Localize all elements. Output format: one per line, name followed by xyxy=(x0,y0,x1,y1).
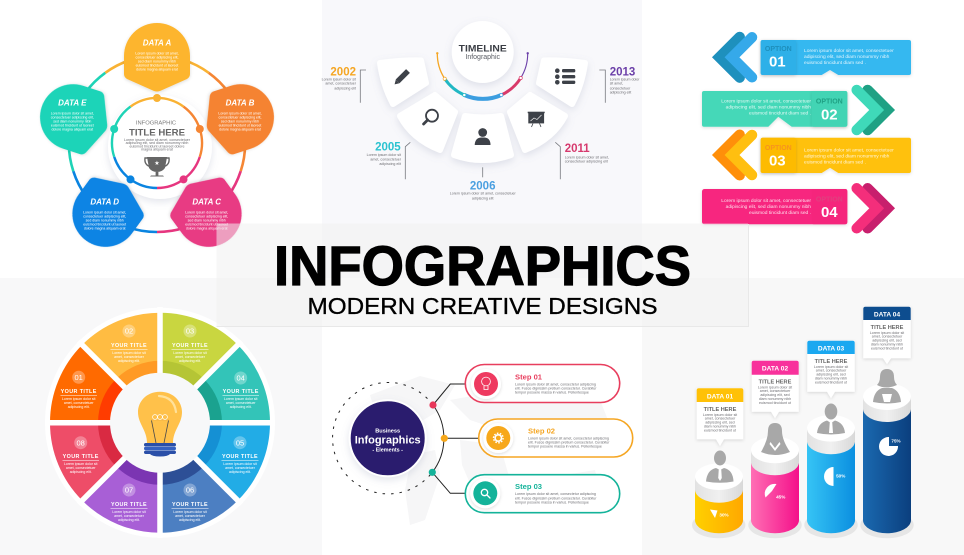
segment 06 xyxy=(172,484,208,522)
center title: euismod tincidunt ut laoreet dolore xyxy=(130,144,184,148)
milestone 2002: 2002 xyxy=(330,66,356,78)
center title: magna aliquam erat xyxy=(141,148,173,152)
cylinder 03: 50% xyxy=(836,474,845,478)
icon: gear xyxy=(494,433,503,443)
segment 07: YOUR TITLE xyxy=(111,502,147,508)
card: DATA 03: diam nonummy nibh xyxy=(815,377,847,381)
card: DATA 02: DATA 02 xyxy=(762,366,788,373)
card: DATA C: sed diam nonummy nibh xyxy=(188,218,226,222)
dashed orbit xyxy=(333,382,433,494)
icon: magnifier xyxy=(481,489,490,498)
step 02: Step 02 xyxy=(528,426,555,436)
card: DATA D: sed diam nonummy nibh xyxy=(86,218,124,222)
card: DATA D: consectetuer adipiscing elit, xyxy=(83,214,126,218)
segment 05 xyxy=(222,436,258,474)
step 02: elit. Fusce dignissim pretium consectetur. Curabitur xyxy=(528,440,610,444)
option 01: adipiscing elit, sed diam nonummy nibh xyxy=(804,54,890,60)
card: DATA 02: Lorem ipsum dolor sit xyxy=(758,386,792,390)
segment 03: Lorem ipsum dolor sit xyxy=(173,351,207,355)
segment 07 xyxy=(110,484,148,522)
option 02: Lorem ipsum dolor sit amet, consectetuer xyxy=(721,98,811,104)
option 02: OPTION xyxy=(816,98,843,106)
person 03 xyxy=(817,404,845,434)
card: DATA D: dolore magna aliquam erat xyxy=(84,226,126,230)
card: DATA 03: amet, consectetuer xyxy=(816,369,847,373)
card: DATA 03: euismod tincidunt ut xyxy=(815,380,847,384)
card: DATA 02: adipiscing elit, sed xyxy=(760,393,790,397)
card: DATA B xyxy=(197,76,283,160)
card: DATA E: euismod tincidunt ut laoreet xyxy=(51,123,94,127)
card: DATA D: Lorem ipsum dolor sit amet, xyxy=(83,210,126,214)
timeline tiles xyxy=(380,60,585,160)
card: DATA 01: amet, consectetuer xyxy=(705,417,736,421)
icon: left chevrons xyxy=(719,135,752,175)
card: DATA B: sed diam nonummy nibh xyxy=(221,119,259,123)
option 04: adipiscing elit, sed diam nonummy nibh xyxy=(726,204,811,210)
segment 06: YOUR TITLE xyxy=(172,502,208,508)
option 02: adipiscing elit, sed diam nonummy nibh xyxy=(726,104,811,110)
option 04: euismod tincidunt diam sed . xyxy=(749,210,811,216)
segment 08 xyxy=(62,436,99,474)
connector nodes xyxy=(429,401,448,476)
segment 05: amet, consectetuer xyxy=(225,466,256,470)
segment 03 xyxy=(172,324,208,363)
center circle title: Infographics xyxy=(355,434,421,446)
card: DATA 01: TITLE HERE xyxy=(704,407,737,413)
person 02 xyxy=(761,423,790,455)
step 01: tempor posuere massa in varius. Pellentesque xyxy=(515,390,589,394)
center title: INFOGRAPHIC xyxy=(136,120,176,126)
milestone 2013: 2013 xyxy=(610,66,635,78)
option 01: Lorem ipsum dolor sit amet, consectetuer xyxy=(804,48,894,54)
card: DATA A: dolore magna aliquam erat xyxy=(136,67,178,71)
timeline arc xyxy=(436,52,529,99)
card: DATA 03 xyxy=(807,341,855,398)
card: DATA E: Lorem ipsum dolor sit amet, xyxy=(51,111,94,115)
segment 01: Lorem ipsum dolor sit xyxy=(62,397,95,401)
icon: right chevrons xyxy=(857,90,888,130)
card: DATA 04 xyxy=(863,307,911,364)
icon: light bulb xyxy=(138,392,182,456)
center circle title xyxy=(350,400,426,476)
card: DATA A: euismod tincidunt ut laoreet xyxy=(136,63,178,67)
card: DATA 01 xyxy=(697,388,743,446)
option 03: OPTION xyxy=(765,145,792,152)
segment 03: adipiscing elit. xyxy=(179,359,201,363)
cylinder 02: 45% xyxy=(776,494,785,500)
segment 07: amet, consectetuer xyxy=(114,514,145,518)
timeline leader lines xyxy=(360,70,605,179)
step 01: Lorem ipsum dolor sit amet, consectetur adipiscing xyxy=(515,382,596,386)
option 01: 01 xyxy=(769,54,786,70)
milestone 2013: sit amet, xyxy=(610,82,623,86)
center title xyxy=(124,120,191,152)
center title: TITLE HERE xyxy=(129,128,186,138)
card: DATA C: euismod tincidunt ut laoreet xyxy=(185,222,228,226)
step 02: tempor posuere massa in varius. Pellentesque xyxy=(528,444,602,448)
card: DATA 03: TITLE HERE xyxy=(815,359,848,365)
cylinder 04: 75% xyxy=(891,439,901,444)
segment 05: 05 xyxy=(236,438,244,447)
option 02: 02 xyxy=(821,106,838,124)
option 04 xyxy=(702,188,888,228)
option 03: 03 xyxy=(769,152,786,170)
icon: left chevrons xyxy=(719,37,752,78)
ring nodes xyxy=(110,94,204,183)
card: DATA 03: adipiscing elit, sed xyxy=(816,373,846,377)
card: DATA B: DATA B xyxy=(226,98,255,108)
step 03: tempor posuere massa in varius. Pellentesque xyxy=(515,500,589,504)
card: DATA A: sed diam nonummy nibh xyxy=(138,59,176,63)
milestone 2011: consectetuer adipiscing elit xyxy=(565,160,608,164)
card: DATA 02: euismod tincidunt ut xyxy=(759,401,791,405)
step 03: Step 03 xyxy=(515,482,542,491)
center title: adipiscing elit, sed diam nonummy nibh xyxy=(126,141,188,145)
cylinder 04 xyxy=(860,383,914,538)
milestone 2006: Lorem ipsum dolor sit amet, consectetuer xyxy=(450,192,516,196)
milestone 2013: Lorem ipsum dolor xyxy=(610,77,640,81)
title banner xyxy=(216,224,748,326)
card: DATA 04: Lorem ipsum dolor sit xyxy=(870,331,904,335)
milestone 2005: adipiscing elit xyxy=(379,162,401,166)
segment 08: adipiscing elit. xyxy=(70,470,92,474)
step 01: elit. Fusce dignissim pretium consectetur. Curabitur xyxy=(515,386,597,390)
sector gaps xyxy=(45,307,275,538)
option 03: euismod tincidunt diam sed . xyxy=(804,160,866,166)
step 01 xyxy=(465,364,620,402)
milestone 2013: adipiscing elit xyxy=(610,91,631,95)
card: DATA D: euismod tincidunt ut laoreet xyxy=(83,222,126,226)
card: DATA D: DATA D xyxy=(90,198,119,206)
step 03 xyxy=(465,475,620,513)
option 02 xyxy=(702,90,888,130)
card: DATA 02 xyxy=(752,361,799,418)
card: DATA 04: DATA 04 xyxy=(874,311,900,318)
card: DATA 01: euismod tincidunt ut xyxy=(704,428,736,432)
card: DATA 04: TITLE HERE xyxy=(871,325,904,331)
segment 07: Lorem ipsum dolor sit xyxy=(112,510,146,514)
card: DATA D xyxy=(59,166,153,260)
card: DATA A: Lorem ipsum dolor sit amet, xyxy=(135,51,179,55)
icon: pie 75% xyxy=(879,437,898,456)
milestone 2011 xyxy=(565,143,609,164)
segment 04: 04 xyxy=(237,374,245,383)
panel: cylinder bar chart xyxy=(692,307,914,538)
segment 02: Lorem ipsum dolor sit xyxy=(112,351,146,355)
option 01: euismod tincidunt diam sed . xyxy=(804,60,866,66)
icon: trophy: ★ xyxy=(154,160,160,167)
cylinder 02 xyxy=(748,437,802,538)
card: DATA C: DATA C xyxy=(192,198,221,206)
card: DATA A: DATA A xyxy=(143,38,171,48)
card: DATA E: DATA E xyxy=(58,98,87,108)
connector lines xyxy=(432,384,479,493)
card: DATA C: consectetuer adipiscing elit, xyxy=(185,214,228,218)
colored sectors xyxy=(50,313,270,533)
center disc xyxy=(110,373,210,473)
panel: eight-segment circle with bulb xyxy=(45,307,275,538)
segment 04: Lorem ipsum dolor sit xyxy=(224,397,257,401)
panel: option arrows xyxy=(702,37,911,228)
card: DATA B: euismod tincidunt ut laoreet xyxy=(219,123,261,127)
segment 08: Lorem ipsum dolor sit xyxy=(64,462,97,466)
card: DATA 01: adipiscing elit, sed xyxy=(705,421,735,425)
card: DATA 01: DATA 01 xyxy=(707,393,733,400)
step 02 xyxy=(479,419,633,457)
segment 03: 03 xyxy=(186,327,194,336)
segment 06: Lorem ipsum dolor sit xyxy=(173,510,207,514)
card: DATA 02: diam nonummy nibh xyxy=(759,397,791,401)
segment 04: amet, consectetuer xyxy=(226,401,256,405)
option 03: Lorem ipsum dolor sit amet, consectetuer xyxy=(804,148,894,154)
segment 03: YOUR TITLE xyxy=(172,343,208,349)
milestone 2002: amet, consectetuer xyxy=(325,82,357,86)
option 03 xyxy=(719,135,911,175)
segment 02: YOUR TITLE xyxy=(111,343,147,349)
segment 07: 07 xyxy=(125,486,133,495)
segment 04: YOUR TITLE xyxy=(223,389,259,395)
panel: timeline infographic xyxy=(322,21,640,200)
milestone 2005 xyxy=(367,142,402,166)
icon: presentation chart xyxy=(528,112,545,127)
segment 01: adipiscing elit. xyxy=(68,405,90,409)
step 03: Lorem ipsum dolor sit amet, consectetur adipiscing xyxy=(515,492,596,496)
segment 06: amet, consectetuer xyxy=(175,514,206,518)
segment 03: amet, consectetuer xyxy=(175,355,206,359)
white outer disc xyxy=(45,308,275,538)
step 02: Lorem ipsum dolor sit amet, consectetur adipiscing xyxy=(528,436,609,440)
outer colored ring xyxy=(69,56,245,232)
step 01: Step 01 xyxy=(515,372,543,382)
icon: pie 30% xyxy=(710,510,718,518)
icon: magnifier xyxy=(424,110,438,124)
segment 08: 08 xyxy=(77,438,85,447)
milestone 2013: consectetuer xyxy=(610,86,631,90)
panel: business steps xyxy=(333,364,633,525)
timeline title disc: TIMELINE xyxy=(459,44,507,54)
milestone 2006 xyxy=(450,180,516,200)
timeline title disc: Infographic xyxy=(465,54,501,61)
option 02: euismod tincidunt diam sed . xyxy=(749,111,811,117)
cylinder 03 xyxy=(804,415,858,538)
main heading: INFOGRAPHICS xyxy=(274,235,691,297)
milestone 2013 xyxy=(610,66,640,95)
icon: pencil xyxy=(395,71,408,84)
cylinder 01 xyxy=(692,463,745,538)
segment 04 xyxy=(222,372,259,409)
segment 05: Lorem ipsum dolor sit xyxy=(223,462,257,466)
milestone 2005: Lorem ipsum dolor sit xyxy=(367,153,401,157)
segment 01: 01 xyxy=(75,373,83,382)
milestone 2005: amet, consectetuer xyxy=(370,157,402,161)
card: DATA 04: amet, consectetuer xyxy=(872,335,903,339)
segment 04: adipiscing elit. xyxy=(230,405,252,409)
card: DATA 04: adipiscing elit, sed xyxy=(872,339,902,343)
center title: Lorem ipsum dolor sit amet, consectetuer xyxy=(124,138,191,142)
milestone 2006: 2006 xyxy=(470,180,495,192)
card: DATA B: Lorem ipsum dolor sit amet, xyxy=(218,111,262,115)
icon: bulb outline xyxy=(482,377,490,390)
faint world map xyxy=(370,376,610,525)
person 01 xyxy=(706,450,734,483)
segment 05: YOUR TITLE xyxy=(222,454,258,460)
milestone 2002: adipiscing elit xyxy=(334,86,356,90)
card: DATA 04: euismod tincidunt ut xyxy=(871,346,903,350)
option 04: Lorem ipsum dolor sit amet, consectetuer xyxy=(721,198,811,204)
option 03: adipiscing elit, sed diam nonummy nibh xyxy=(804,154,890,160)
card: DATA E: consectetuer adipiscing elit, xyxy=(51,115,94,119)
segment 02: adipiscing elit. xyxy=(118,359,140,363)
card: DATA C: Lorem ipsum dolor sit amet, xyxy=(185,210,228,214)
icon: pie 45% xyxy=(765,484,776,498)
segment 01 xyxy=(60,371,97,409)
person 04 xyxy=(873,369,901,404)
segment 08: amet, consectetuer xyxy=(66,466,96,470)
card: DATA C xyxy=(161,166,255,260)
card: DATA E: sed diam nonummy nibh xyxy=(53,119,91,123)
segment 06: adipiscing elit. xyxy=(179,518,201,522)
icon: trophy xyxy=(145,157,169,176)
card: DATA 01: diam nonummy nibh xyxy=(704,425,736,429)
icon: right chevrons xyxy=(857,188,888,228)
segment 07: adipiscing elit. xyxy=(118,518,140,522)
center white disc xyxy=(108,95,212,199)
segment 06: 06 xyxy=(186,486,194,495)
card: DATA 01: Lorem ipsum dolor sit xyxy=(703,413,737,417)
milestone 2002 xyxy=(322,66,357,90)
milestone 2011: Lorem ipsum dolor sit amet, xyxy=(565,155,609,159)
icon: list xyxy=(555,68,575,85)
card: DATA E xyxy=(31,76,117,160)
segment 02 xyxy=(110,324,148,363)
inner colored ring xyxy=(112,98,202,188)
center circle title: Business xyxy=(375,428,400,434)
milestone 2005: 2005 xyxy=(375,142,401,154)
segment 02: 02 xyxy=(125,327,133,336)
timeline title disc xyxy=(452,21,514,83)
card: DATA 02: TITLE HERE xyxy=(759,380,792,386)
segment 01: YOUR TITLE xyxy=(61,389,97,395)
subheading: MODERN CREATIVE DESIGNS xyxy=(308,293,658,319)
icon: person xyxy=(475,128,490,145)
segment 05: adipiscing elit. xyxy=(229,470,251,474)
card: DATA 03: Lorem ipsum dolor sit xyxy=(814,365,848,369)
card: DATA 03: DATA 03 xyxy=(818,345,844,352)
center circle title: - Elements - xyxy=(372,448,403,454)
card: DATA 02: amet, consectetuer xyxy=(760,389,791,393)
milestone 2002: Lorem ipsum dolor sit xyxy=(322,77,356,81)
option 04: 04 xyxy=(821,204,838,221)
icon: pie 50% xyxy=(824,467,834,486)
option 01: OPTION xyxy=(765,46,792,53)
milestone 2011: 2011 xyxy=(565,143,590,155)
cylinder 01: 30% xyxy=(719,512,729,518)
card: DATA A xyxy=(124,23,190,92)
segment 02: amet, consectetuer xyxy=(114,355,145,359)
segment 01: amet, consectetuer xyxy=(64,401,94,405)
milestone 2006: adipiscing elit xyxy=(472,196,493,200)
card: DATA E: dolore magna aliquam erat xyxy=(51,127,93,131)
option 01 xyxy=(719,37,911,78)
panel: five-part data cycle xyxy=(31,23,283,260)
card: DATA C: dolore magna aliquam erat xyxy=(186,226,228,230)
step 03: elit. Fusce dignissim pretium consectetur. Curabitur xyxy=(515,496,597,500)
card: DATA B: dolore magna aliquam erat xyxy=(219,127,261,131)
segment 08: YOUR TITLE xyxy=(63,454,99,460)
option 04: OPTION xyxy=(816,196,843,204)
card: DATA B: consectetuer adipiscing elit, xyxy=(218,115,262,119)
card: DATA A: consectetuer adipiscing elit, xyxy=(136,55,179,59)
card: DATA 04: diam nonummy nibh xyxy=(871,343,903,347)
